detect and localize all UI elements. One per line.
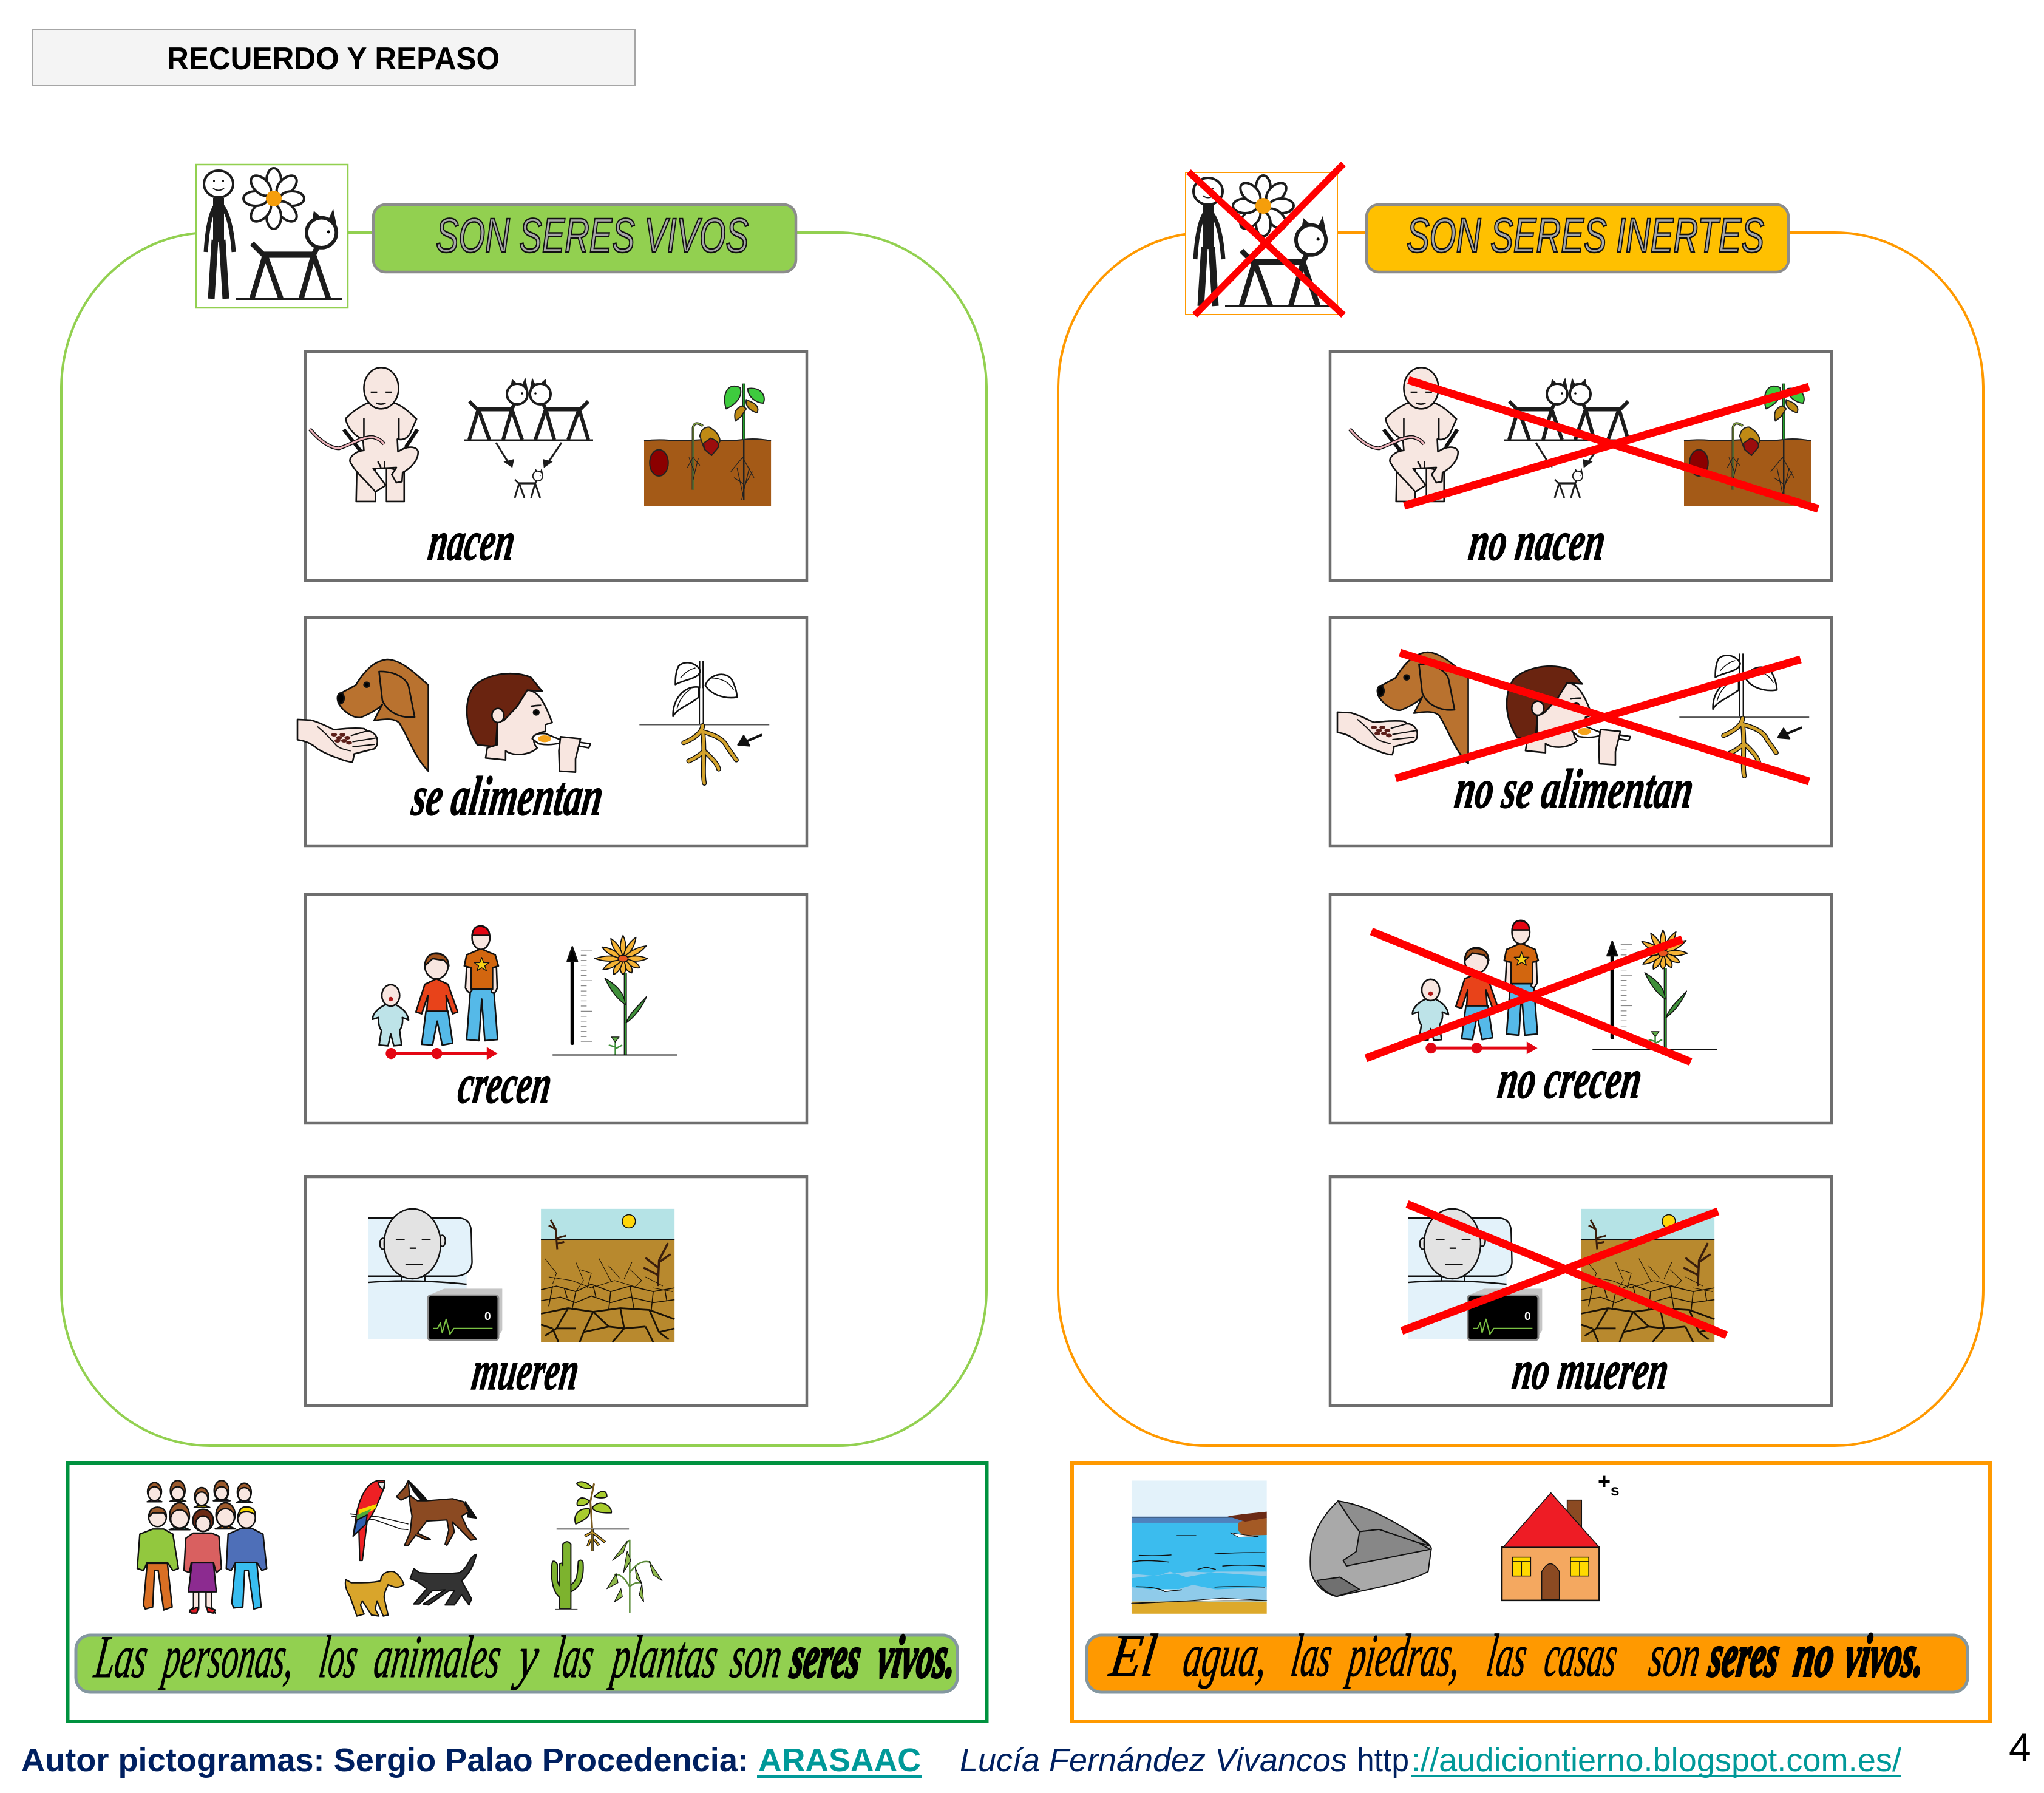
icon: animals [345, 1480, 477, 1616]
footer credits [21, 1742, 1901, 1778]
caption text: living: los [316, 1622, 362, 1690]
icon: inert beings crossed out [1186, 164, 1343, 315]
card: no se alimentan: no se alimentan [1452, 758, 1697, 820]
card: mueren: mueren [469, 1339, 583, 1401]
footer credits: ARASAAC [758, 1742, 921, 1778]
heading: son seres inertes: SON SERES INERTES [1407, 208, 1764, 262]
heading: son seres vivos [373, 205, 796, 272]
caption text: inert: casas [1541, 1621, 1622, 1689]
caption text: living: vivos. [874, 1622, 961, 1690]
title [32, 29, 635, 86]
card: no se alimentan [1330, 618, 1832, 846]
caption bar: living [76, 1635, 957, 1692]
card: no nacen: no nacen [1465, 510, 1609, 572]
caption text: inert: El [1105, 1621, 1161, 1689]
caption text: living: Las [90, 1622, 152, 1690]
card: no mueren [1330, 1177, 1832, 1406]
card: crecen: crecen [455, 1053, 555, 1115]
card: no crecen: no crecen [1495, 1048, 1646, 1110]
caption text: living [90, 1622, 961, 1690]
title: RECUERDO Y REPASO [167, 41, 500, 77]
plural marker: + [1598, 1469, 1611, 1494]
icon: house [1502, 1493, 1599, 1601]
card: crecen [305, 894, 807, 1123]
footer credits: Lucía Fernández Vivancos [960, 1742, 1347, 1778]
caption text: inert: las [1483, 1621, 1532, 1689]
panel: living examples [68, 1463, 987, 1721]
caption text: living: personas, [158, 1622, 299, 1690]
caption text: inert: son [1645, 1621, 1705, 1689]
icon: water [1132, 1480, 1267, 1614]
caption text: inert: seres [1705, 1621, 1784, 1689]
heading: son seres vivos: SON SERES VIVOS [436, 208, 749, 262]
footer credits: ://audiciontierno.blogspot.com.es/ [1411, 1742, 1901, 1778]
page number: 4 [2009, 1725, 2031, 1770]
caption text: inert: las [1288, 1621, 1337, 1689]
panel: living things outline [61, 233, 986, 1446]
heading: son seres inertes [1367, 205, 1788, 272]
card: nacen: nacen [425, 510, 519, 572]
caption text: living: animales [370, 1622, 506, 1690]
card: se alimentan [297, 618, 807, 846]
caption text: inert: agua, [1180, 1621, 1272, 1689]
caption text: living: las [550, 1622, 599, 1690]
footer credits: Autor pictogramas: Sergio Palao Procedencia: [21, 1742, 749, 1778]
card: mueren [305, 1177, 807, 1406]
caption text: inert [1105, 1621, 1929, 1689]
icon: plants [551, 1482, 662, 1613]
caption text: living: plantas [606, 1622, 722, 1690]
caption text: living: seres [786, 1622, 866, 1690]
caption text: living: son [727, 1622, 787, 1690]
caption text: inert: piedras, [1343, 1621, 1465, 1689]
icon: group of people [137, 1480, 267, 1613]
card: no nacen [1330, 352, 1832, 580]
icon: living beings [196, 165, 348, 308]
caption text: inert: no [1790, 1621, 1839, 1689]
footer credits: http [1357, 1742, 1409, 1778]
card: no mueren: no mueren [1509, 1339, 1672, 1401]
panel: inert things outline [1058, 233, 1983, 1446]
caption text: inert: vivos. [1841, 1621, 1929, 1689]
card: nacen [305, 352, 807, 580]
icon: rock [1310, 1501, 1431, 1596]
caption text: living: y [511, 1622, 543, 1690]
caption bar: inert [1087, 1635, 1968, 1692]
plural marker: s [1611, 1481, 1620, 1499]
card: se alimentan: se alimentan [408, 765, 607, 827]
panel: inert examples [1072, 1463, 1990, 1721]
card: no crecen [1330, 894, 1832, 1123]
